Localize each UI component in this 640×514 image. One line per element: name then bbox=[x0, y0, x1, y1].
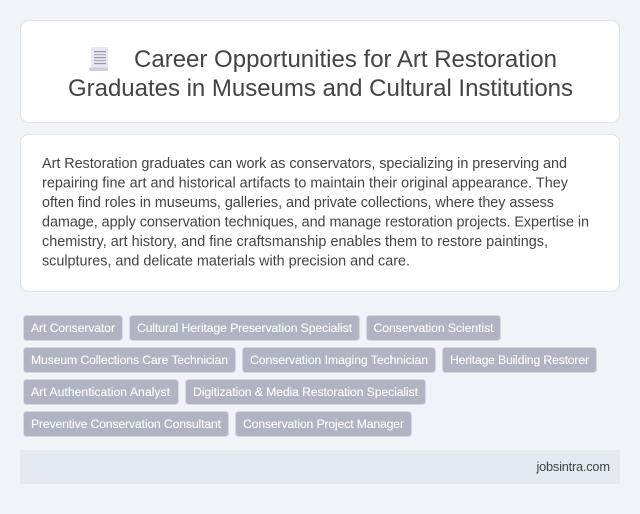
heading bbox=[68, 46, 573, 102]
tag: Digitization & Media Restoration Specialist: Digitization & Media Restoration Specialist bbox=[193, 385, 419, 399]
tag: Conservation Scientist: Conservation Scientist bbox=[374, 321, 494, 335]
tag: Preventive Conservation Consultant bbox=[24, 412, 228, 436]
tag: Museum Collections Care Technician bbox=[24, 348, 236, 372]
tag: Digitization & Media Restoration Specialist bbox=[186, 380, 426, 404]
tag: Conservation Imaging Technician bbox=[242, 348, 436, 372]
footer bar: jobsintra.com bbox=[536, 459, 610, 474]
text block: description: repairing fine art and historical artifacts to maintain their original appearance. They bbox=[42, 176, 569, 192]
tag: Heritage Building Restorer bbox=[442, 348, 596, 372]
text block: description: chemistry, art history, and fine craftsmanship enables them to restore paintings, bbox=[42, 234, 548, 250]
text block: description: damage, apply conservation techniques, and manage restoration projects. Expertise in bbox=[42, 214, 589, 230]
tag: Cultural Heritage Preservation Specialist bbox=[130, 316, 360, 340]
panel: description card bbox=[20, 134, 620, 292]
tag: Conservation Imaging Technician: Conservation Imaging Technician bbox=[250, 353, 428, 367]
text block: description: often find roles in museums, galleries, and private collections, where they assess bbox=[42, 195, 554, 211]
panel: title card bbox=[20, 20, 620, 122]
heading: Career Opportunities for Art Restoration bbox=[134, 46, 557, 73]
text block: description: sculptures, and delicate materials with precision and care. bbox=[42, 254, 410, 270]
tag: Conservation Project Manager: Conservation Project Manager bbox=[243, 417, 404, 431]
heading: Graduates in Museums and Cultural Institutions bbox=[68, 75, 573, 102]
tag: Art Conservator: Art Conservator bbox=[31, 321, 115, 335]
text block: description: Art Restoration graduates can work as conservators, specializing in preserving and bbox=[42, 156, 567, 172]
tag: Art Authentication Analyst bbox=[24, 380, 178, 404]
tag: Art Conservator bbox=[24, 316, 122, 340]
tag: Preventive Conservation Consultant: Preventive Conservation Consultant bbox=[31, 417, 222, 431]
tag list bbox=[24, 316, 596, 436]
tag: Cultural Heritage Preservation Specialist: Cultural Heritage Preservation Specialist bbox=[137, 321, 353, 335]
tag: Art Authentication Analyst: Art Authentication Analyst bbox=[31, 385, 171, 399]
tag: Museum Collections Care Technician: Museum Collections Care Technician bbox=[31, 353, 228, 367]
tag: Conservation Scientist bbox=[366, 316, 500, 340]
tag: Heritage Building Restorer: Heritage Building Restorer bbox=[450, 353, 589, 367]
footer bar bbox=[20, 450, 620, 484]
tag: Conservation Project Manager bbox=[236, 412, 412, 436]
text block: description bbox=[42, 156, 589, 270]
icon: document scroll bbox=[89, 47, 108, 71]
